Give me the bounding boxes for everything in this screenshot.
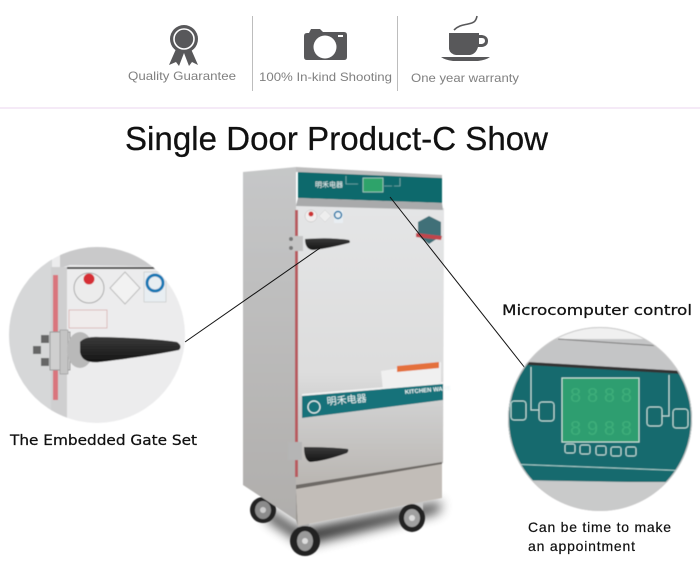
cabinet top trim bbox=[296, 167, 442, 178]
inset display: 8988 bbox=[570, 418, 632, 440]
warning labels bbox=[305, 210, 343, 223]
wheels bbox=[250, 496, 425, 556]
note label bbox=[381, 362, 441, 390]
caption: appointment bbox=[528, 519, 671, 554]
inset latch bbox=[33, 330, 93, 374]
title: Single Door Product-C Show bbox=[125, 120, 548, 157]
panel display bbox=[363, 178, 383, 192]
inset warning labels bbox=[74, 272, 166, 304]
caption: appointment: Can be time to make bbox=[528, 519, 671, 535]
inset display bbox=[562, 378, 639, 442]
wheel: rear left bbox=[250, 496, 276, 523]
wheel: right bbox=[399, 498, 425, 532]
inset keys bbox=[511, 401, 688, 456]
inset: gate detail bbox=[9, 247, 185, 423]
panel logo: 明禾电器 bbox=[315, 180, 343, 189]
leader: gate set bbox=[185, 248, 320, 342]
header strip bbox=[128, 16, 519, 85]
lower handle bbox=[288, 442, 348, 462]
label: in-kind shooting: 100% In-kind Shooting bbox=[259, 70, 392, 84]
icon: ribbon medal bbox=[169, 25, 198, 66]
inset: control panel detail bbox=[508, 327, 692, 512]
upper handle bbox=[289, 236, 350, 251]
inset display: 8888 bbox=[570, 385, 632, 407]
wheel: front bbox=[290, 520, 320, 556]
floor shadow bbox=[262, 502, 442, 545]
door bbox=[296, 203, 444, 486]
cabinet side bbox=[243, 167, 296, 520]
band logo: 明禾电器 bbox=[326, 392, 367, 408]
band text: KITCHEN WARE bbox=[405, 386, 451, 396]
icon: coffee cup bbox=[441, 16, 490, 61]
inset handle bbox=[80, 337, 181, 362]
label: microcomputer control: Microcomputer control bbox=[502, 303, 692, 319]
icon: camera bbox=[304, 29, 347, 60]
badge bbox=[416, 216, 442, 244]
label: quality guarantee: Quality Guarantee bbox=[128, 69, 236, 83]
leader: microcomputer bbox=[390, 197, 525, 368]
teal door band bbox=[302, 382, 451, 418]
label: gate set: The Embedded Gate Set bbox=[9, 433, 198, 449]
caption: appointment: an appointment bbox=[528, 538, 635, 554]
label: one year warranty: One year warranty bbox=[411, 71, 519, 85]
control panel bbox=[296, 172, 443, 210]
base drawer bbox=[296, 462, 442, 526]
steamer cabinet bbox=[243, 167, 451, 556]
door red gasket bbox=[295, 210, 298, 477]
